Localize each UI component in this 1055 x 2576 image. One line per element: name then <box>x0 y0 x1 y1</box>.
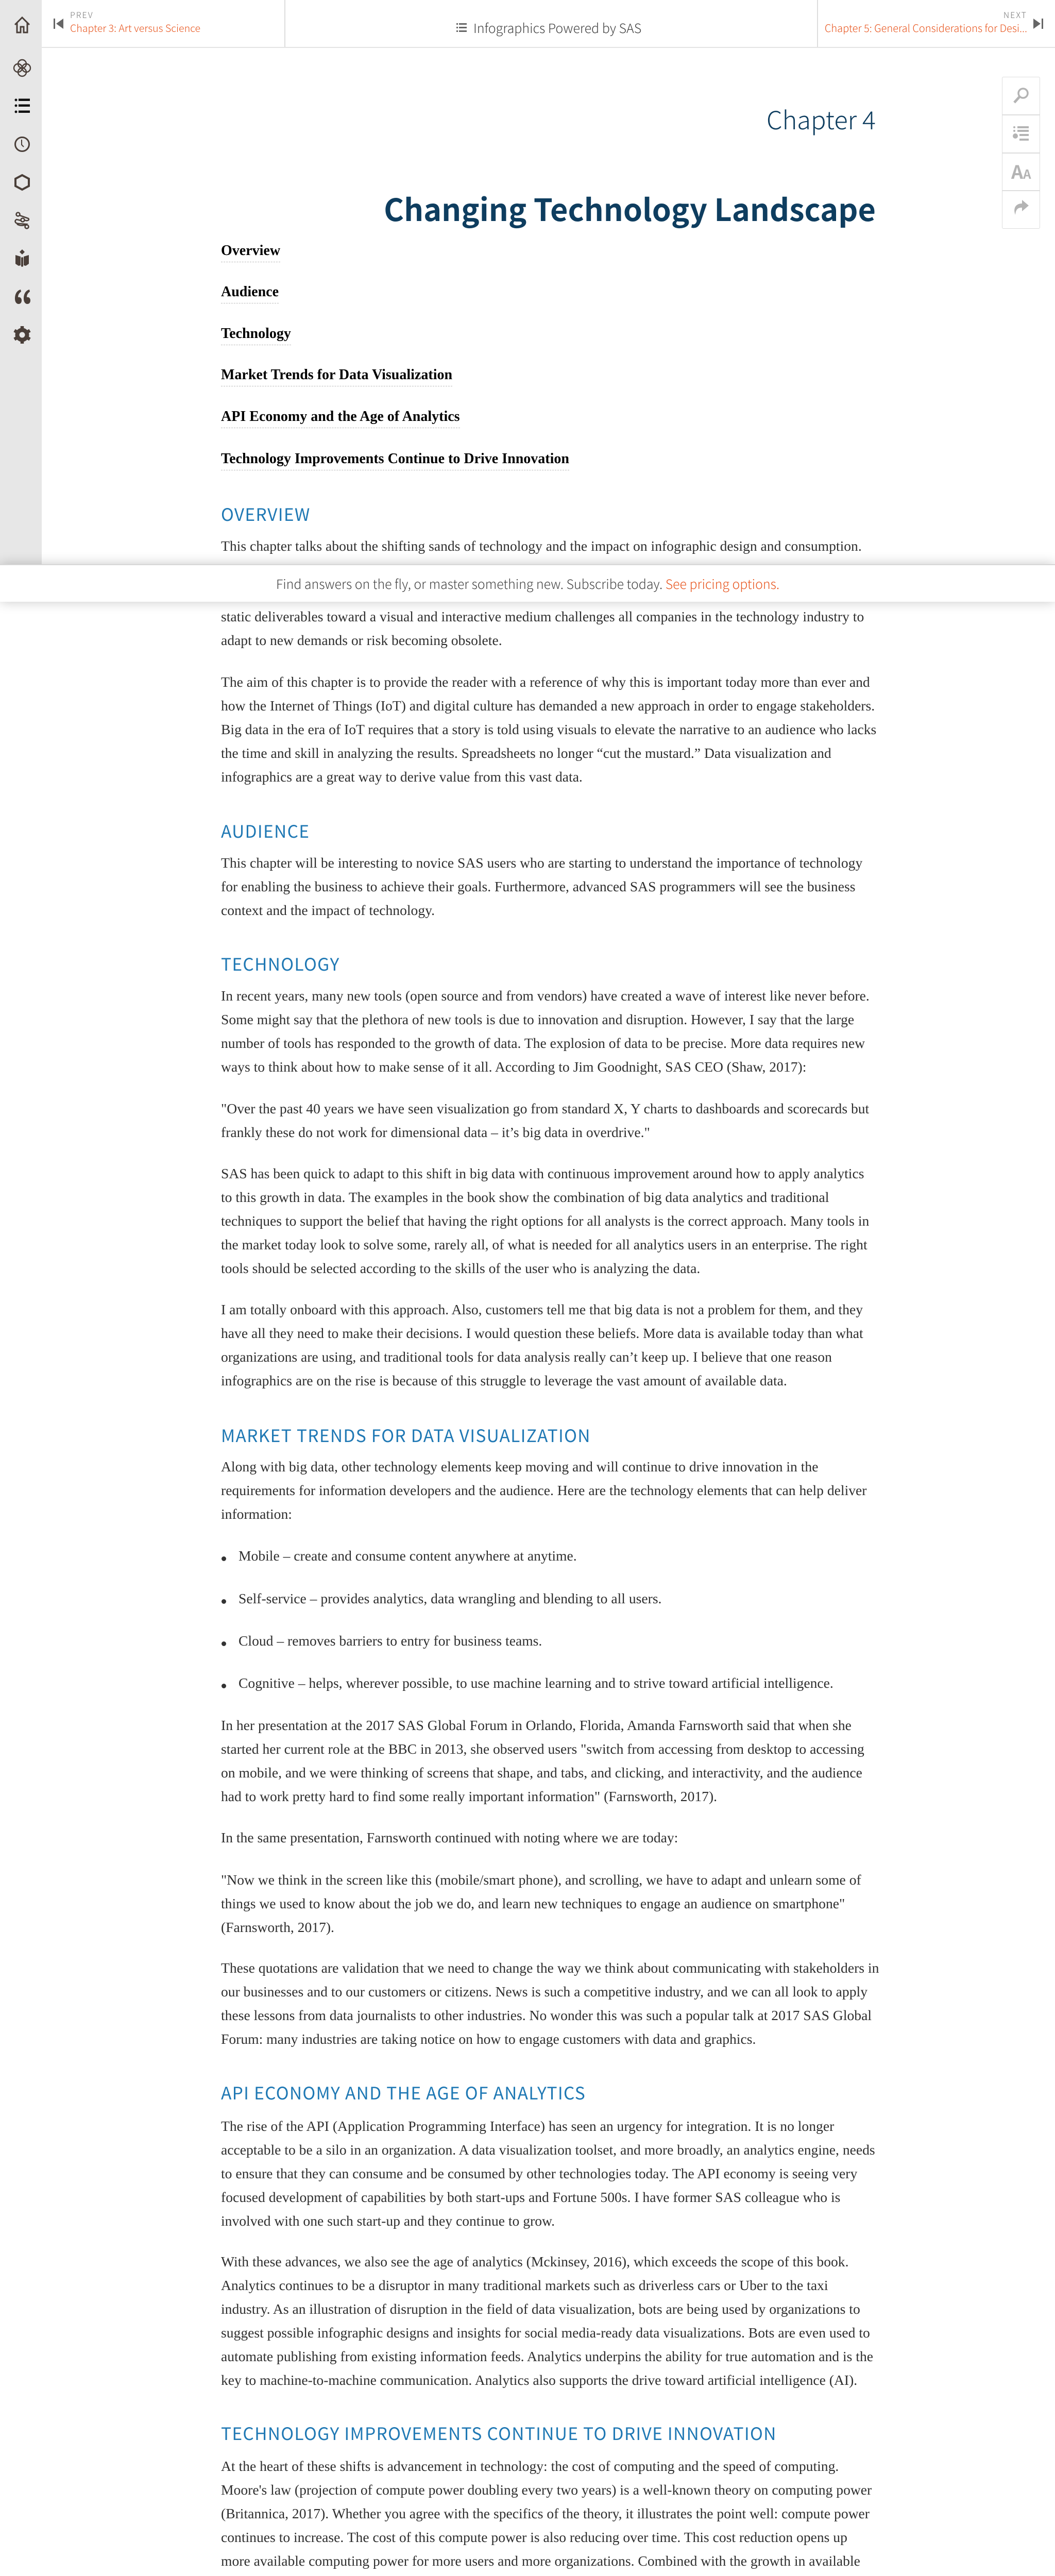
quote: Farnsworth: (Farnsworth, 2017). <box>221 1919 334 1935</box>
paragraph: Farnsworth presentation <box>221 1717 864 1804</box>
paragraph: author opinion: I am totally onboard with this approach. Also, customers tell me that big data is not a problem for them, and they <box>221 1301 863 1317</box>
label: next: NEXT <box>1003 8 1027 21</box>
divider <box>1002 114 1040 115</box>
paragraph: author opinion: infographics are on the rise is because of this struggle to leverage the vast amount of available data. <box>221 1372 787 1388</box>
paragraph: rise of the API <box>221 2118 875 2229</box>
icon: share arrow <box>1014 200 1029 215</box>
panel: subscribe banner <box>0 564 1055 602</box>
quote: Farnsworth: things we used to know about the job we do, and learn new techniques to engage an audience on smartphone" <box>221 1895 845 1911</box>
list: technology elements <box>222 1548 833 1691</box>
paragraph: new tools: number of tools has responded to the growth of data. The explosion of data to be precise. More data requires new <box>221 1035 865 1051</box>
paragraph: chapter aim: infographics are a great way to derive value from this vast data. <box>221 769 583 785</box>
list item: cloud: Cloud – removes barriers to entry for business teams. <box>239 1633 542 1649</box>
icon: clock <box>14 137 30 152</box>
list item: cognitive: Cognitive – helps, wherever possible, to use machine learning and to strive toward artificial intelligence. <box>239 1675 833 1691</box>
paragraph: overview continued: static deliverables toward a visual and interactive medium challenges all companies in the technology industry to <box>221 608 864 624</box>
contents link: technology improvements: Technology Improvements Continue to Drive Innovation <box>221 451 569 467</box>
paragraph: compute advancement: Moore's law (projection of compute power doubling every two years) is a well-known theory on computing power <box>221 2482 872 2498</box>
heading: overview: OVERVIEW <box>221 501 311 526</box>
icon: cube stack <box>15 249 29 267</box>
paragraph: same presentation: In the same presentation, Farnsworth continued with noting where we are today: <box>221 1829 678 1845</box>
paragraph: overview first line: This chapter talks about the shifting sands of technology and the impact on infographic design and consumption. <box>221 538 862 554</box>
paragraph: age of analytics: With these advances, we also see the age of analytics (Mckinsey, 2016), which exceeds the scope of this book. <box>221 2253 849 2269</box>
paragraph: quotations validation: these lessons from data journalists to other industries. No wonder this was such a popular talk at 2017 SAS Global <box>221 2007 872 2023</box>
paragraph: chapter aim: The aim of this chapter is to provide the reader with a reference of why this is important today more than ever and <box>221 674 870 690</box>
icon: next arrow <box>1033 19 1043 29</box>
paragraph: author opinion: have all they need to make their decisions. I would question these beliefs. More data is available today than what <box>221 1325 863 1341</box>
heading: technology improvements: TECHNOLOGY IMPROVEMENTS CONTINUE TO DRIVE INNOVATION <box>221 2420 777 2445</box>
paragraph: market intro <box>221 1459 866 1522</box>
paragraph: chapter aim: how the Internet of Things (IoT) and digital culture has demanded a new approach in order to engage stakeholders. <box>221 698 875 714</box>
book title: Infographics Powered by SAS <box>473 19 641 37</box>
divider <box>1002 152 1040 154</box>
paragraph: rise of the API: involved with one such start-up and they continue to grow. <box>221 2213 555 2229</box>
icon: home <box>14 16 30 33</box>
paragraph: compute advancement: continues to increase. The cost of this compute power is also reducing over time. This cost reduction opens up <box>221 2529 847 2545</box>
paragraph: new tools: ways to think about how to make sense of it all. According to Jim Goodnight, SAS CEO (Shaw, 2017): <box>221 1059 806 1075</box>
paragraph: Farnsworth presentation: on mobile, and we were thinking of screens that shape, and tabs, and clicking, and interactivity, and the audience <box>221 1765 862 1781</box>
paragraph: Farnsworth presentation: In her presentation at the 2017 SAS Global Forum in Orlando, Florida, Amanda Farnsworth said that when she <box>221 1717 852 1733</box>
link: previous chapter: Chapter 3: Art versus Science <box>70 20 200 35</box>
paragraph: market intro: requirements for information developers and the audience. Here are the technology elements that can help deliver <box>221 1482 866 1498</box>
heading: audience: AUDIENCE <box>221 818 310 843</box>
icon: quotation mark <box>15 290 30 304</box>
title: Changing Technology Landscape <box>384 186 876 230</box>
contents link: market trends: Market Trends for Data Visualization <box>221 367 452 383</box>
link: next chapter: Chapter 5: General Considerations for Desi... <box>825 20 1027 35</box>
paragraph: SAS adaptation: to this growth in data. The examples in the book show the combination of big data analytics and traditional <box>221 1189 829 1205</box>
paragraph: new tools <box>221 988 870 1075</box>
paragraph: compute advancement: more available computing power for more users and more organizations. Combined with the growth in available <box>221 2553 860 2569</box>
paragraph: chapter aim: Big data in the era of IoT requires that a story is told using visuals to elevate the narrative to an audience who lacks <box>221 721 876 737</box>
divider <box>1002 190 1040 191</box>
list item: mobile: Mobile – create and consume content anywhere at anytime. <box>239 1548 577 1564</box>
paragraph: rise of the API: acceptable to be a silo in an organization. A data visualization toolset, and more broadly, an analytics engine, needs <box>221 2142 875 2158</box>
paragraph: Farnsworth presentation: had to work pretty hard to find some really important information" (Farnsworth, 2017). <box>221 1788 717 1804</box>
paragraph: age of analytics: key to machine-to-machine communication. Analytics also supports the drive toward artificial intelligence (AI). <box>221 2372 857 2388</box>
paragraph: overview continued: adapt to new demands or risk becoming obsolete. <box>221 632 502 648</box>
paragraph: author opinion: organizations are using, and traditional tools for data analysis really can’t keep up. I believe that one reason <box>221 1349 832 1365</box>
paragraph: chapter aim <box>221 674 876 785</box>
contents link: api economy: API Economy and the Age of Analytics <box>221 409 460 425</box>
heading: api economy: API ECONOMY AND THE AGE OF ANALYTICS <box>221 2079 586 2105</box>
paragraph: compute advancement: (Britannica, 2017). Whether you agree with the specifics of the theory, it illustrates the point well: compute power <box>221 2505 870 2521</box>
paragraph: rise of the API: to ensure that they can consume and be consumed by other technologies today. The API economy is seeing very <box>221 2165 857 2181</box>
paragraph: market intro: Along with big data, other technology elements keep moving and will continue to drive innovation in the <box>221 1459 818 1475</box>
chapter label: Chapter 4 <box>767 100 876 137</box>
paragraph: age of analytics: automate publishing from existing information feeds. Analytics underpins the ability for true automation and is the <box>221 2348 873 2364</box>
quote: Farnsworth <box>221 1872 861 1935</box>
paragraph: overview continued <box>221 608 864 648</box>
contents link: audience: Audience <box>221 284 279 300</box>
icon: list <box>14 99 30 113</box>
quote: Goodnight: "Over the past 40 years we have seen visualization go from standard X, Y charts to dashboards and scorecards but <box>221 1100 869 1116</box>
paragraph: rise of the API: The rise of the API (Application Programming Interface) has seen an urgency for integration. It is no longer <box>221 2118 834 2134</box>
paragraph: compute advancement <box>221 2454 877 2576</box>
list item: self-service: Self-service – provides analytics, data wrangling and blending to all users. <box>239 1590 661 1606</box>
paragraph: quotations validation: These quotations are validation that we need to change the way we think about communicating with stakeholders in <box>221 1960 879 1976</box>
paragraph: SAS adaptation: tools should be selected according to the skills of the user who is analyzing the data. <box>221 1260 700 1276</box>
paragraph: SAS adaptation <box>221 1165 869 1276</box>
paragraph: SAS adaptation: techniques to support the belief that having the right options for all analysts is the correct approach. Many tools in <box>221 1213 869 1229</box>
paragraph: Farnsworth presentation: started her current role at the BBC in 2013, she observed users "switch from accessing from desktop to accessing <box>221 1741 864 1757</box>
paragraph: compute advancement: At the heart of these shifts is advancement in technology: the cost of computing and the speed of computing. <box>221 2458 839 2474</box>
paragraph: quotations validation <box>221 1960 879 2047</box>
heading: market trends: MARKET TRENDS FOR DATA VISUALIZATION <box>221 1422 591 1447</box>
paragraph: quotations validation: Forum: many industries are taking notice on how to engage customers with data and graphics. <box>221 2031 756 2047</box>
heading: technology: TECHNOLOGY <box>221 951 340 976</box>
paragraph: SAS adaptation: the market today look to solve some, rarely all, of what is needed for all analytics users in an enterprise. The right <box>221 1236 867 1252</box>
paragraph: market intro: information: <box>221 1506 292 1522</box>
icon: interlocked circles <box>13 59 31 77</box>
paragraph: age of analytics <box>221 2253 873 2388</box>
icon: add to list <box>1013 126 1029 141</box>
paragraph: chapter aim: the time and skill in analyzing the results. Spreadsheets no longer “cut the mustard.” Data visualization and <box>221 745 831 761</box>
icon: hexagon <box>14 174 30 191</box>
divider: next section <box>817 0 818 47</box>
paragraph: rise of the API: focused development of capabilities by both start-ups and Fortune 500s. I have former SAS colleague who is <box>221 2189 840 2205</box>
icon: gear <box>13 326 31 344</box>
paragraph: age of analytics: industry. As an illustration of disruption in the field of data visualization, bots are being used by organizations to <box>221 2301 860 2317</box>
panel: left icon sidebar <box>0 0 42 602</box>
contents link: technology: Technology <box>221 326 291 342</box>
paragraph: SAS adaptation: SAS has been quick to adapt to this shift in big data with continuous improvement around how to apply analytics <box>221 1165 864 1181</box>
paragraph: audience: This chapter will be interesting to novice SAS users who are starting to understand the importance of technology <box>221 855 862 871</box>
paragraph: age of analytics: Analytics continues to be a disruptor in many traditional markets such as driverless cars or Uber to the taxi <box>221 2277 828 2293</box>
paragraph: quotations validation: our businesses and to our customers or citizens. News is such a competitive industry, and we can all look to apply <box>221 1984 867 1999</box>
icon: book contents list <box>456 23 467 32</box>
panel: top navigation bar <box>42 0 1055 48</box>
icon: search <box>1013 88 1029 103</box>
icon: font size: AA <box>1011 158 1031 184</box>
banner message: Find answers on the fly, or master something new. Subscribe today. See pricing options. <box>276 574 779 593</box>
divider: previous section <box>284 0 285 47</box>
quote: Goodnight: frankly these do not work for dimensional data – it’s big data in overdrive." <box>221 1124 650 1140</box>
paragraph: audience: context and the impact of technology. <box>221 902 435 918</box>
paragraph: new tools: Some might say that the plethora of new tools is due to innovation and disruption. However, I say that the large <box>221 1011 854 1027</box>
quote: Goodnight <box>221 1100 869 1140</box>
paragraph: audience <box>221 855 862 918</box>
label: prev: PREV <box>70 8 94 21</box>
paragraph: age of analytics: suggest possible infographic designs and insights for social media-ready data visualizations. Bots are even used to <box>221 2325 870 2341</box>
contents link: overview: Overview <box>221 243 280 259</box>
quote: Farnsworth: "Now we think in the screen like this (mobile/smart phone), and scrolling, we have to adapt and unlearn some of <box>221 1872 861 1888</box>
icon: connected nodes <box>14 212 30 229</box>
paragraph: author opinion <box>221 1301 863 1388</box>
paragraph: audience: for enabling the business to achieve their goals. Furthermore, advanced SAS programmers will see the business <box>221 878 855 894</box>
panel: floating reader tools <box>1002 77 1040 229</box>
icon: previous arrow <box>54 19 63 29</box>
paragraph: new tools: In recent years, many new tools (open source and from vendors) have created a wave of interest like never before. <box>221 988 870 1004</box>
